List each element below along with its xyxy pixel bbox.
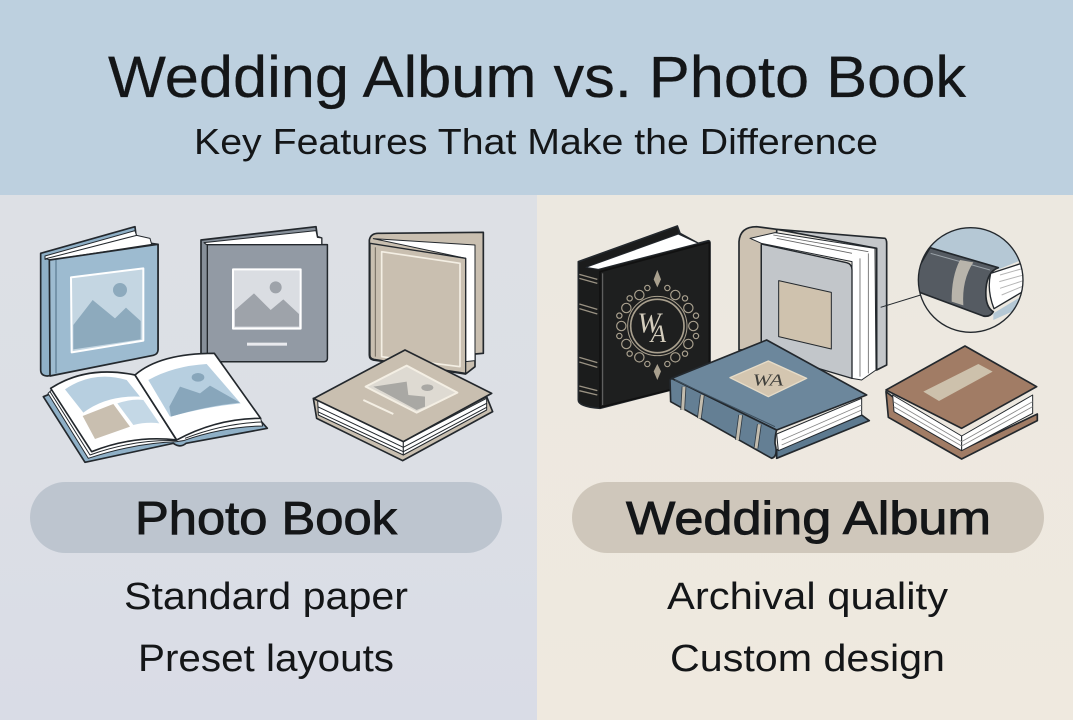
pill: photo book (30, 482, 502, 553)
connector line (881, 295, 921, 307)
monogram: W (637, 309, 663, 340)
icon: blue lying album (670, 340, 869, 458)
monogram: A (649, 320, 667, 348)
icon: spine detail circle (918, 227, 1024, 333)
subtitle: Key Features That Make the Difference (194, 121, 878, 162)
panel: right background (537, 195, 1073, 720)
ornament wreath (617, 270, 699, 380)
heading: photo book: Photo Book (135, 492, 398, 544)
text: preset layouts: Preset layouts (138, 638, 394, 680)
panel: left background (0, 195, 537, 720)
text: custom design: Custom design (670, 638, 945, 680)
text: archival quality: Archival quality (667, 576, 948, 618)
icon: grey photo book (201, 227, 327, 362)
icon: blue lying album: WA (753, 371, 784, 390)
text: standard paper: Standard paper (124, 576, 408, 618)
title: Wedding Album vs. Photo Book (108, 45, 967, 110)
icon: grey window album (739, 227, 921, 380)
icon: beige lying photo book (313, 350, 493, 461)
icon: black wedding album (578, 226, 710, 408)
header band (0, 0, 1073, 195)
illustration: photo books (41, 227, 493, 462)
heading: wedding album: Wedding Album (626, 492, 991, 544)
icon: blue photo book (41, 227, 158, 376)
icon: beige photo book (369, 232, 483, 374)
monogram (637, 309, 667, 348)
icon: open photo book (43, 353, 267, 462)
icon: brown lying album (886, 346, 1037, 459)
illustration: wedding albums (578, 223, 1037, 459)
pill: wedding album (572, 482, 1044, 553)
